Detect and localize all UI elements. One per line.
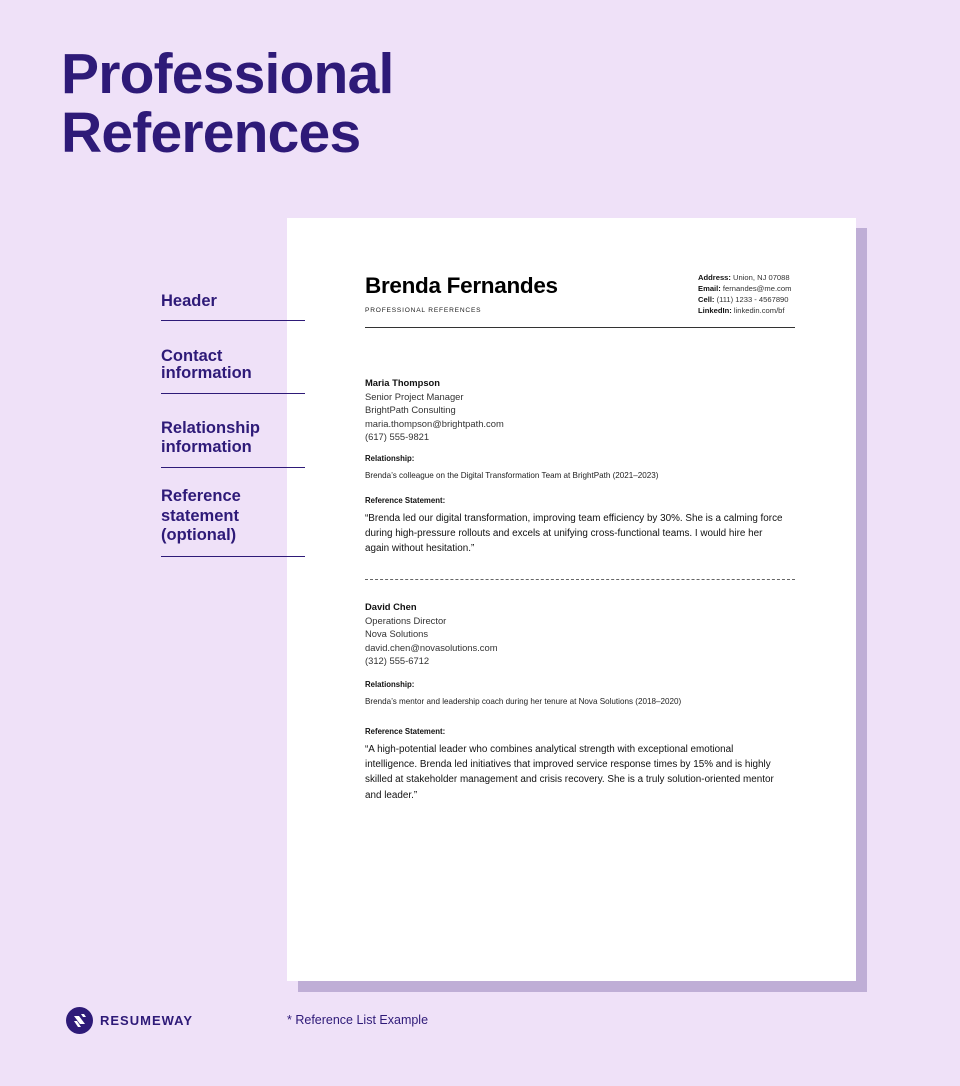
reference 1: again without hesitation.” (365, 543, 474, 554)
reference 2: skilled at stakeholder management and crisis recovery. She is a truly solution-oriented mentor (365, 774, 774, 785)
logo: RESUMEWAY (100, 1013, 193, 1028)
contact details 1: Maria Thompson (365, 377, 440, 388)
reference 2: and leader.” (365, 790, 417, 801)
statement 2: Reference Statement: (365, 727, 445, 736)
contact details 2: Nova Solutions (365, 628, 428, 639)
caption: * Reference List Example (287, 1013, 428, 1027)
title: Professional (61, 42, 394, 106)
label: relationship information (161, 419, 260, 456)
reference 1: during high-pressure rollouts and excels at unifying cross-functional teams. I would hire her (365, 528, 762, 539)
relationship 1: Relationship: (365, 454, 414, 463)
reference 1: Brenda’s colleague on the Digital Transformation Team at BrightPath (2021–2023) (365, 471, 659, 480)
reference 2: intelligence. Brenda led initiatives that improved service response times by 15% and is highly (365, 759, 771, 770)
contact details 2: David Chen (365, 601, 417, 612)
label: reference statement (161, 487, 241, 544)
doc header name: Brenda Fernandes (365, 273, 558, 298)
contact info block: Email: fernandes@me.com (698, 284, 791, 293)
label: header: Header (161, 292, 217, 310)
contact details 2: david.chen@novasolutions.com (365, 642, 498, 652)
contact details 1: (617) 555-9821 (365, 431, 429, 442)
reference 2 (365, 601, 774, 801)
contact info block: Cell: (111) 1233 - 4567890 (698, 295, 788, 304)
label: relationship information: Relationship (161, 419, 260, 437)
contact details 2: (312) 555-6712 (365, 655, 429, 666)
reference 2: “A high-potential leader who combines analytical strength with exceptional emotional (365, 744, 733, 755)
label: relationship information: information (161, 438, 252, 456)
label: contact information: Contact (161, 347, 222, 365)
label: contact information (161, 347, 252, 382)
contact details 2: Operations Director (365, 614, 446, 626)
contact details 1: BrightPath Consulting (365, 404, 456, 415)
logo (66, 1007, 193, 1034)
contact details 1 (365, 377, 504, 442)
reference 1: “Brenda led our digital transformation, improving team efficiency by 30%. She is a calming force (365, 513, 783, 524)
paper shadow (298, 228, 867, 992)
statement 1: Reference Statement: (365, 496, 445, 505)
doc subtitle: PROFESSIONAL REFERENCES (365, 307, 481, 314)
contact details 1: maria.thompson@brightpath.com (365, 418, 504, 428)
contact details 2 (365, 601, 498, 666)
label: reference statement: Reference (161, 487, 241, 505)
label: contact information: information (161, 364, 252, 382)
reference 1 (365, 377, 783, 554)
relationship 2: Relationship: (365, 680, 414, 689)
label: reference statement: (optional) (161, 526, 236, 544)
title (61, 42, 394, 165)
label: reference statement: statement (161, 506, 239, 524)
reference 2: Brenda’s mentor and leadership coach during her tenure at Nova Solutions (2018–2020) (365, 697, 681, 706)
title: References (61, 101, 360, 165)
contact info block: Address: Union, NJ 07088 (698, 273, 790, 282)
contact info block: LinkedIn: linkedin.com/bf (698, 306, 785, 315)
icon: logo mark (66, 1007, 93, 1034)
paper: reference list document (287, 218, 856, 981)
contact details 1: Senior Project Manager (365, 390, 464, 402)
contact info block (698, 273, 791, 315)
